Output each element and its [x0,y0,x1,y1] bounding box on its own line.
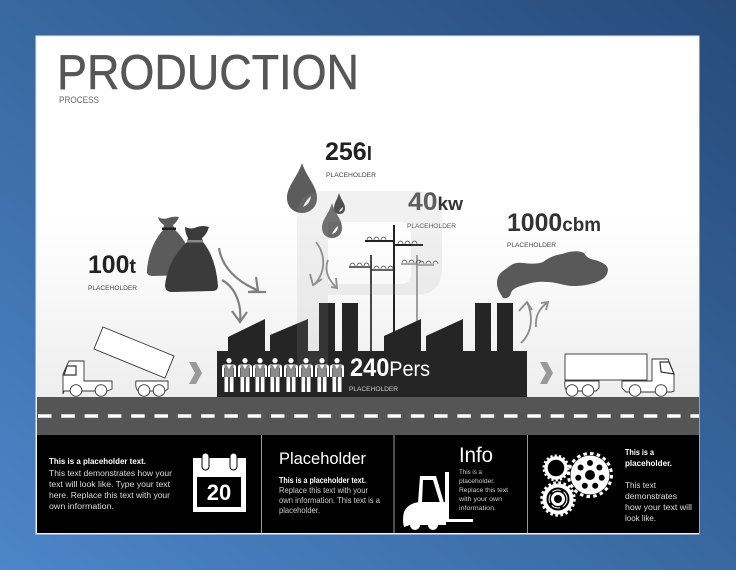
stat: 100t: 100t [88,251,136,279]
stat: 240 Pers: PLACEHOLDER [349,386,398,393]
stat: 40kw: 40kw [408,188,464,216]
icon: power lines [349,225,438,352]
factory [217,303,527,397]
text block: left: text will look like. Type your text [49,479,171,489]
chevron [540,362,553,384]
text block: right: demonstrates [625,491,678,501]
panel: footer [37,435,699,533]
text block: right [625,447,692,523]
chevron [189,362,202,384]
stat: 240 Pers [349,354,430,393]
arrows: bags to factory [219,248,266,322]
text block: left: This text demonstrates how your [49,468,172,478]
text block: info: Replace this text [459,487,508,494]
stat: 1000cbm [507,209,601,249]
stat: 1000cbm: 1000cbm [507,209,601,237]
stat: 256l [325,138,376,179]
text block: info: This is a [459,469,482,476]
icon: bags [147,217,218,292]
stat: 100t [88,251,137,292]
text block: placeholder: Placeholder [279,449,366,468]
icon: water drops [287,163,345,238]
stat: 40kw [407,188,464,230]
workers [222,358,344,392]
text block: placeholder: Replace this text with your [279,485,368,495]
stat: 1000cbm: PLACEHOLDER [507,242,556,249]
stat: 240 Pers: 240Pers [350,354,430,382]
road [37,397,699,435]
text block: info: with your own [458,496,502,503]
text block: left: This is a placeholder text. [49,456,146,466]
text block: placeholder: own information. This text is a [279,495,380,505]
text block: right: look like. [625,513,656,523]
text block: left: here. Replace this text with your [49,490,170,500]
arrows: water to factory [310,242,337,288]
icon: smoke cloud [497,251,608,298]
icon: calendar [193,453,246,512]
panel: main [36,36,699,534]
text block: placeholder: placeholder. [279,505,320,515]
watermark [297,191,442,366]
icon: gears [542,454,612,516]
stat: 100t: PLACEHOLDER [88,285,137,292]
text block: right: how your text will [625,502,692,512]
text block: placeholder [279,449,380,515]
stat: 256l: PLACEHOLDER [326,172,376,179]
text block: right: This is a [625,447,654,457]
text block: info: placeholder. [459,478,495,485]
icon: forklift [403,472,473,530]
icon: tipper truck [63,327,174,396]
arrows: smoke [519,302,548,343]
subtitle: PROCESS [59,95,99,105]
text block: info [458,444,508,512]
stat: 40kw: PLACEHOLDER [407,223,456,230]
icon: delivery truck [565,354,674,396]
stat: 256l: 256l [325,138,372,166]
text block: right: placeholder. [625,458,672,468]
text block: placeholder: This is a placeholder text. [279,475,366,485]
icon: calendar: 20 [207,480,231,505]
text block: left [49,456,172,511]
text block: info: Info [459,444,493,467]
text block: left: own information. [49,501,114,511]
title: PRODUCTION [57,46,359,100]
text block: info: information. [459,505,496,512]
text block: right: This text [625,480,657,490]
